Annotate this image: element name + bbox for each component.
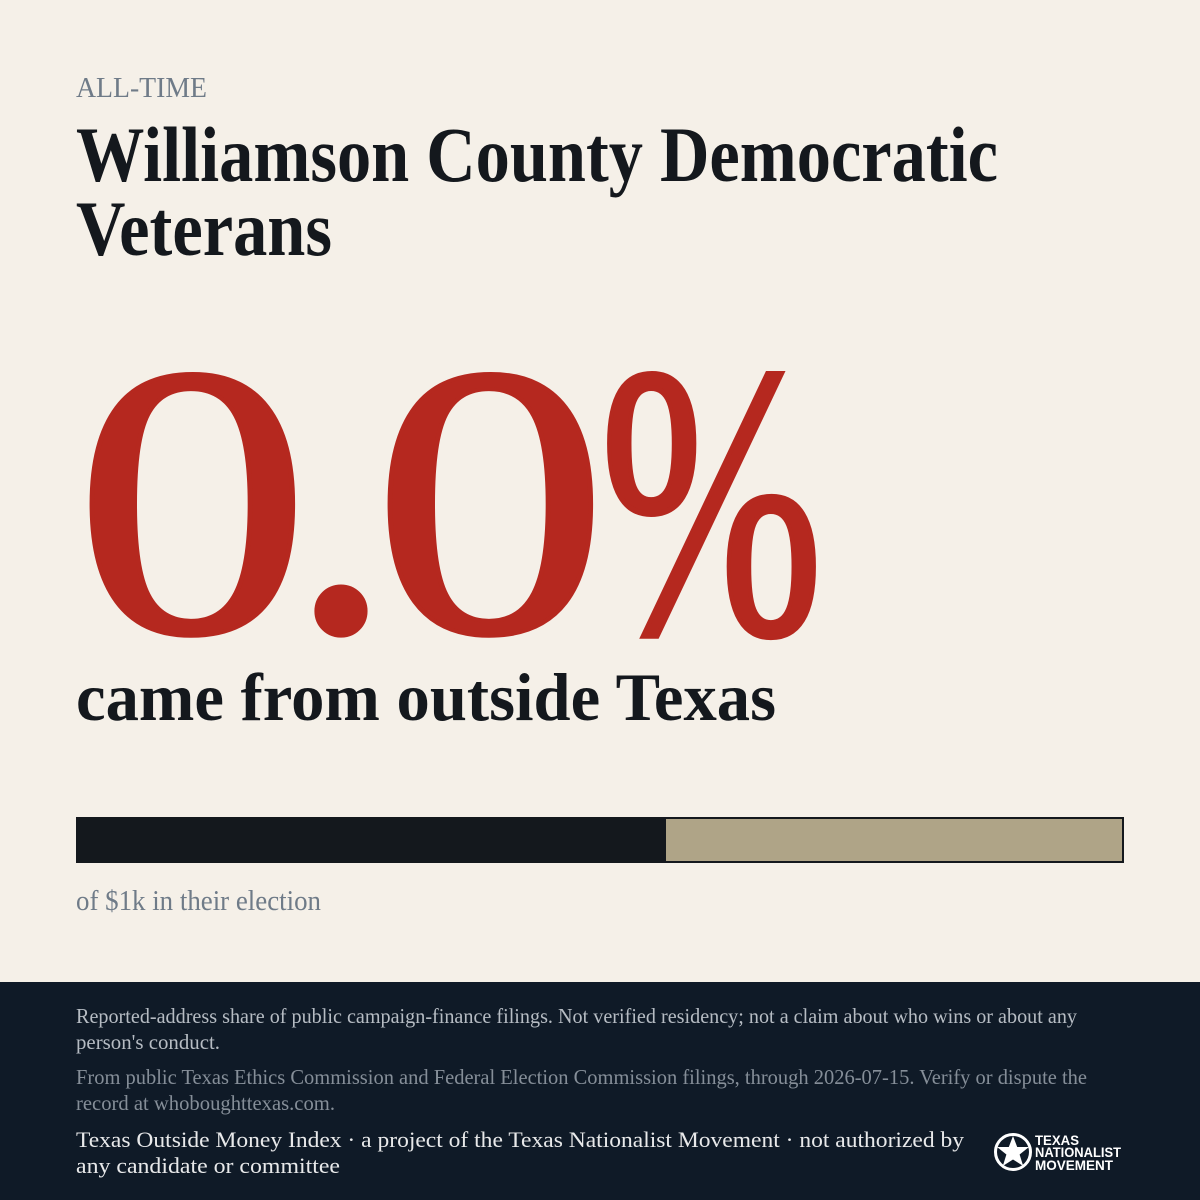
- title: Veterans: [76, 185, 332, 272]
- title: [76, 111, 998, 272]
- big number: 0.0%: %: [600, 287, 823, 717]
- progress bar: [76, 817, 1124, 863]
- attribution text: [76, 1127, 964, 1178]
- subheading: came from outside Texas: [76, 659, 776, 735]
- title: Williamson County Democratic: [76, 111, 998, 198]
- disclaimer text: [76, 1004, 1077, 1054]
- attribution text: any candidate or committee: [76, 1153, 340, 1178]
- eyebrow: all-time: ALL-TIME: [76, 72, 207, 104]
- source text: [76, 1065, 1087, 1115]
- logo: Texas Nationalist Movement: NATIONALIST: [1035, 1145, 1122, 1160]
- disclaimer text: Reported-address share of public campaign-finance filings. Not verified residency; not a claim about who wins or about any: [76, 1004, 1077, 1028]
- footer panel: [0, 982, 1200, 1200]
- big number: 0.0%: .: [300, 341, 382, 704]
- big number: 0.0%: 0: [74, 286, 311, 716]
- big number: 0.0%: [74, 286, 823, 717]
- big number: 0.0%: 0: [372, 286, 609, 716]
- source text: From public Texas Ethics Commission and Federal Election Commission filings, through 2026-07-15. Verify or dispute the: [76, 1065, 1087, 1089]
- logo: Texas Nationalist Movement: [996, 1133, 1122, 1173]
- logo: Texas Nationalist Movement: MOVEMENT: [1035, 1158, 1114, 1173]
- disclaimer text: person's conduct.: [76, 1030, 220, 1054]
- attribution text: Texas Outside Money Index · a project of the Texas Nationalist Movement · not authorized by: [76, 1127, 964, 1152]
- bar caption: of $1k in their election: [76, 885, 321, 917]
- source text: record at whoboughttexas.com.: [76, 1091, 335, 1115]
- logo: Texas Nationalist Movement: TEXAS: [1035, 1133, 1079, 1148]
